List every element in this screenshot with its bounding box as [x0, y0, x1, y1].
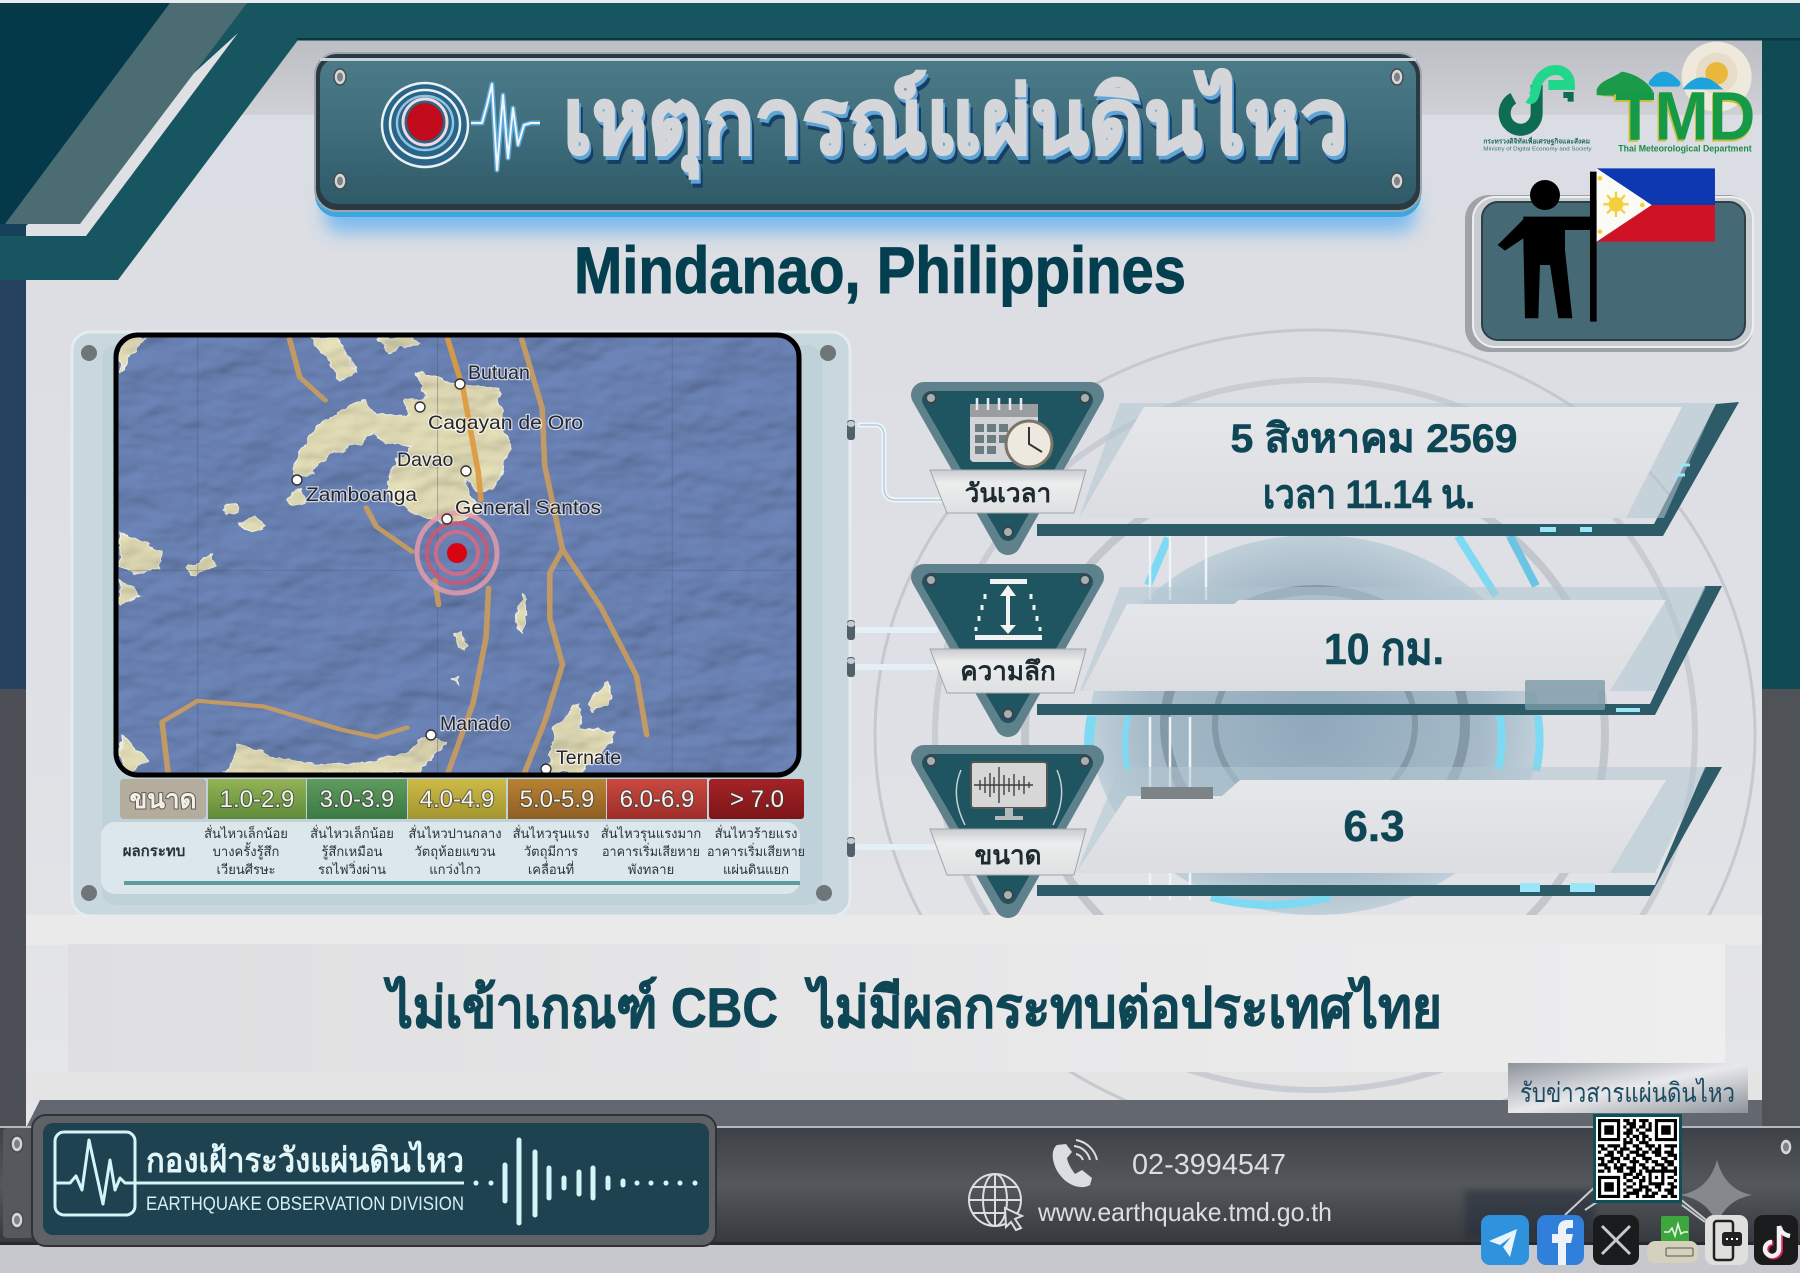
legend: magnitude scale — [120, 779, 804, 819]
legend: impact descriptions: เคลื่อนที่ — [528, 861, 574, 877]
badge: magnitude — [924, 756, 1091, 905]
title text: เหตุการณ์แผ่นดินไหว — [567, 77, 1352, 187]
icon: earthquake app — [1647, 1216, 1698, 1263]
icon: rivets — [334, 69, 1403, 189]
legend: magnitude scale: 4.0-4.9 — [420, 786, 494, 813]
legend: impact descriptions: แกว่งไกว — [429, 862, 481, 877]
logos — [1483, 42, 1755, 157]
legend: impact descriptions: วัตถุห้อยแขวน — [414, 844, 496, 860]
badge: date and time: วันเวลา — [965, 478, 1051, 508]
legend: magnitude scale: 5.0-5.9 — [520, 786, 594, 813]
legend: magnitude scale: 1.0-2.9 — [220, 786, 294, 813]
value: date and time: 5 สิงหาคม 2569 — [1230, 417, 1518, 461]
legend: impact descriptions — [101, 822, 805, 894]
location heading: Mindanao, Philippines — [574, 233, 1186, 307]
legend: impact descriptions: แผ่นดินแยก — [723, 862, 789, 877]
QR code — [1593, 1114, 1682, 1203]
logo: digital economy ministry — [1483, 70, 1592, 153]
legend: magnitude scale: > 7.0 — [730, 786, 784, 813]
legend: impact descriptions: วัตถุมีการ — [524, 844, 578, 860]
logo: digital economy ministry: Ministry of Digital Economy and Society — [1483, 147, 1592, 153]
city markers and labels: Davao — [397, 449, 454, 471]
banner: CBC notice: ไม่เข้าเกณฑ์ CBC — [384, 975, 778, 1039]
title text: เหตุการณ์แผ่นดินไหว — [565, 73, 1350, 183]
call to action: earthquake news: รับข่าวสารแผ่นดินไหว — [1520, 1078, 1735, 1108]
legend: impact descriptions: สั่นไหวรุนแรง — [513, 825, 589, 842]
panel: map and legend glass frame — [72, 332, 850, 916]
call to action: earthquake news — [1508, 1063, 1748, 1113]
icon: pulse box — [55, 1132, 464, 1215]
legend: impact descriptions: สั่นไหวเล็กน้อย — [310, 824, 394, 841]
icon: facebook — [1537, 1215, 1584, 1265]
city markers and labels: Butuan — [468, 362, 530, 384]
city markers and labels: Cagayan de Oro — [428, 412, 583, 434]
city markers and labels: Ternate — [556, 747, 621, 769]
icon: person holding flag — [1498, 168, 1715, 322]
legend: impact descriptions: ผลกระทบ — [123, 843, 185, 860]
legend: impact descriptions: สั่นไหวรุนแรงมาก — [601, 825, 701, 842]
legend: impact descriptions: สั่นไหวปานกลาง — [408, 825, 502, 841]
panel: magnitude — [1037, 767, 1722, 896]
value: depth: 10 กม. — [1324, 625, 1444, 674]
icon: telegram — [1481, 1215, 1529, 1265]
city markers and labels: General Santos — [455, 497, 601, 519]
legend: magnitude scale: ขนาด — [129, 784, 197, 814]
city markers and labels — [292, 362, 621, 774]
icon: phone — [1053, 1140, 1097, 1187]
white band above CBC banner — [26, 915, 1762, 945]
badge: magnitude: ขนาด — [974, 840, 1042, 870]
logo: digital economy ministry: กระทรวงดิจิทัลเพื่อเศรษฐกิจและสังคม — [1483, 135, 1590, 146]
legend: impact descriptions: สั่นไหวเล็กน้อย — [204, 824, 288, 841]
icon: X — [1593, 1215, 1639, 1265]
decorative star and blurred shadow — [1465, 1160, 1752, 1240]
logo: TMD — [1597, 42, 1755, 157]
legend: magnitude scale: 3.0-3.9 — [320, 786, 394, 813]
icon: seismograph monitor — [956, 762, 1062, 825]
value: date and time: เวลา 11.14 น. — [1263, 473, 1475, 517]
legend: impact descriptions: รู้สึกเหมือน — [321, 844, 383, 860]
legend: impact descriptions: บางครั้งรู้สึก — [213, 842, 279, 860]
badge: depth — [924, 575, 1091, 724]
icon: calendar and clock — [970, 398, 1052, 467]
panel: country flag box — [1465, 168, 1753, 352]
title text: เหตุการณ์แผ่นดินไหว — [563, 69, 1348, 179]
legend: impact descriptions: อาคารเริ่มเสียหาย — [602, 843, 700, 859]
legend: impact descriptions: เวียนศีรษะ — [216, 862, 276, 877]
top-left chevron decoration — [0, 3, 298, 280]
icon: tiktok — [1754, 1215, 1798, 1265]
epicentre marker — [417, 513, 497, 593]
icon: globe with cursor — [969, 1174, 1022, 1230]
title plate — [315, 53, 1421, 232]
icon: depth arrow — [975, 579, 1042, 640]
social media icons — [1481, 1215, 1798, 1265]
legend: magnitude scale: 6.0-6.9 — [620, 786, 694, 813]
background concentric rings — [875, 330, 1755, 1140]
badge: depth: ความลึก — [960, 656, 1056, 686]
audio waveform — [476, 1140, 695, 1223]
logo: TMD: Thai Meteorological Department — [1618, 143, 1752, 153]
contact details: www.earthquake.tmd.go.th — [1037, 1197, 1332, 1227]
legend: impact descriptions: รถไฟวิ่งผ่าน — [318, 861, 386, 877]
panel: division name screen: กองเฝ้าระวังแผ่นดินไหว — [146, 1140, 464, 1180]
banner: CBC notice — [68, 944, 1725, 1072]
value: magnitude: 6.3 — [1343, 802, 1405, 851]
panel: division name screen: EARTHQUAKE OBSERVATION DIVISION — [146, 1194, 464, 1215]
legend: impact descriptions: อาคารเริ่มเสียหาย — [707, 843, 805, 859]
contact details — [969, 1140, 1332, 1230]
panel: depth — [1037, 586, 1722, 715]
city markers and labels: Zamboanga — [306, 484, 417, 506]
logo: TMD: TMD — [1613, 81, 1755, 157]
connectors from map to badges — [847, 420, 945, 857]
panel: date and time — [1037, 402, 1739, 536]
icon: phone chat — [1705, 1215, 1748, 1265]
city markers and labels: Manado — [440, 713, 511, 735]
value: date and time — [1230, 417, 1518, 517]
banner: CBC notice: ไม่มีผลกระทบต่อประเทศไทย — [804, 975, 1442, 1039]
legend: impact descriptions: สั่นไหวร้ายแรง — [715, 825, 797, 841]
panel: division name screen — [32, 1115, 716, 1246]
logo: TMD: TMD — [1615, 79, 1755, 155]
map — [114, 332, 802, 778]
badge: date and time — [924, 393, 1091, 542]
footer bar — [0, 1100, 1800, 1246]
legend: impact descriptions: พังทลาย — [628, 862, 674, 877]
contact details: 02-3994547 — [1132, 1149, 1286, 1181]
icon: earthquake target and wave — [382, 83, 540, 170]
